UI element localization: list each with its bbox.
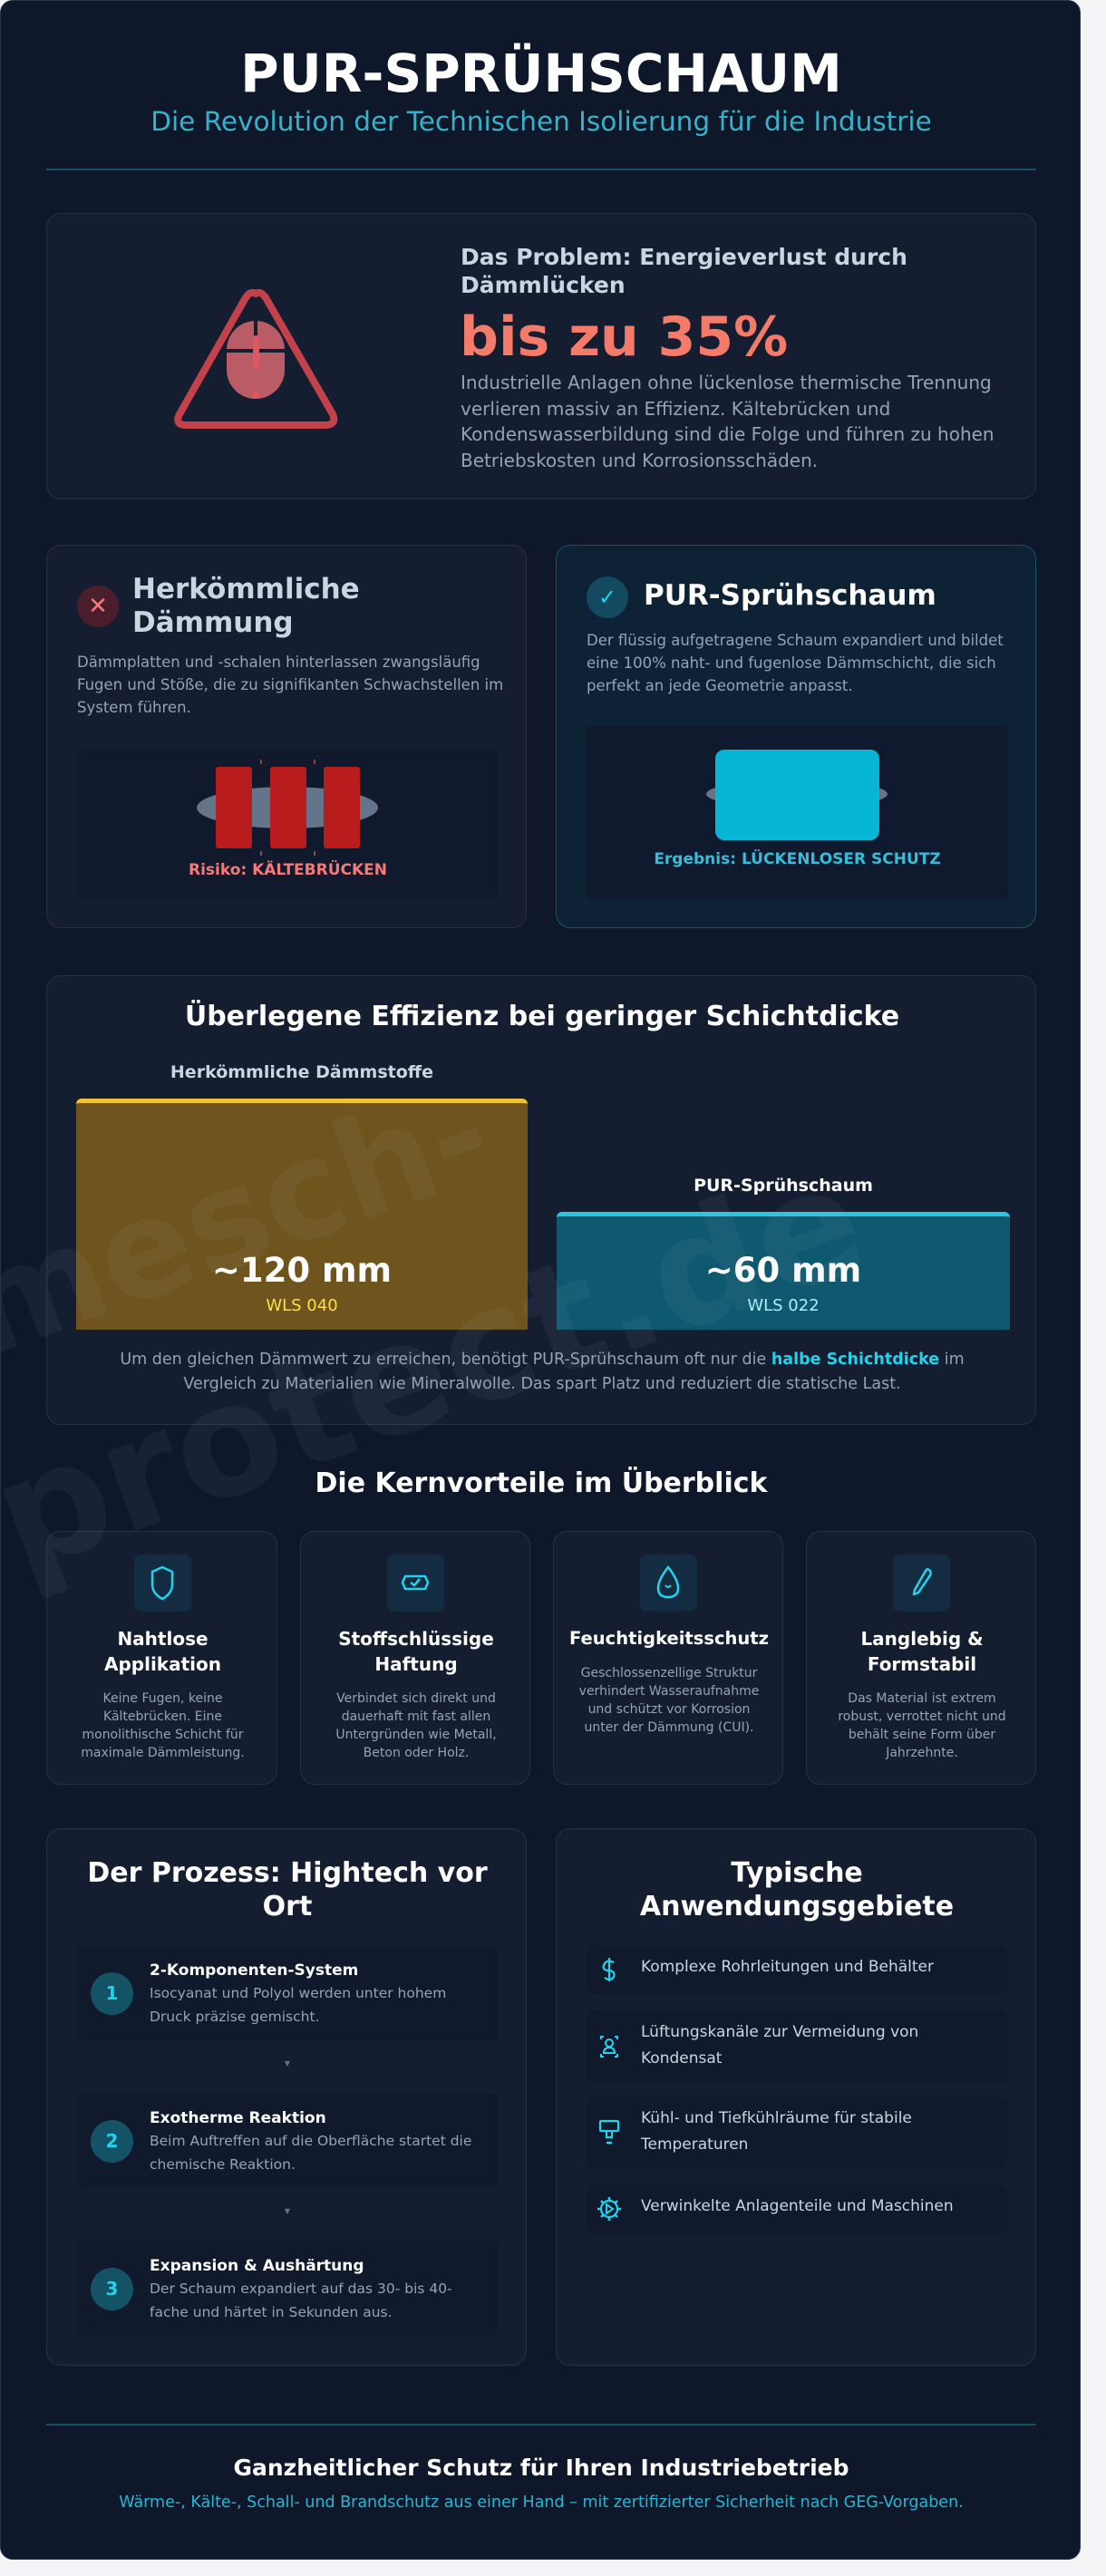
text: Dämmplatten und -schalen hinterlassen zwangsläufig Fugen und Stöße, die zu signifikanten Schwachstellen im System führen. — [77, 654, 503, 716]
step 3: 3 — [106, 2278, 118, 2300]
footer heading: Ganzheitlicher Schutz für Ihren Industriebetrieb — [233, 2455, 849, 2481]
step 1: 2-Komponenten-System — [150, 1961, 358, 1980]
bar: PUR: WLS 022 — [747, 1296, 820, 1315]
panel: benefit 1 — [46, 1531, 277, 1785]
step 2 — [77, 2093, 499, 2188]
bar: conventional: ~120 mm — [212, 1251, 392, 1290]
heading: core benefits: Die Kernvorteile im Überblick — [315, 1467, 767, 1499]
step 1: Isocyanat und Polyol werden unter hohem Druck präzise gemischt. — [150, 1985, 446, 2025]
icon: warning triangle — [174, 288, 337, 429]
item 4: Verwinkelte Anlagenteile und Maschinen — [641, 2197, 954, 2215]
icon: x — [77, 586, 119, 627]
arrow: ▼ — [285, 2059, 290, 2068]
problem heading: Das Problem: Energieverlust durch Dämmlücken — [461, 244, 907, 298]
arrow: ▼ — [285, 2207, 290, 2215]
step 2: Exotherme Reaktion — [150, 2109, 326, 2127]
icon: x: ✕ — [88, 593, 108, 620]
text: Der flüssig aufgetragene Schaum expandiert und bildet eine 100% naht- und fugenlose Dämmschicht, die sich perfekt an jede Geometrie anpasst. — [587, 632, 1004, 694]
item 2 — [587, 2010, 1008, 2083]
text: Keine Fugen, keine Kältebrücken. Eine monolithische Schicht für maximale Dämmleistung. — [81, 1691, 245, 1760]
panel: efficiency — [46, 975, 1036, 1425]
footer text: Wärme-, Kälte-, Schall- und Brandschutz aus einer Hand – mit zertifizierter Sicherheit nach GEG-Vorgaben. — [119, 2494, 964, 2512]
item 1 — [587, 1945, 1008, 1994]
icon: bond — [387, 1554, 444, 1612]
bar: PUR — [557, 1176, 1010, 1330]
text: Das Material ist extrem robust, verrottet nicht und behält seine Form über Jahrzehnte. — [838, 1691, 1006, 1760]
title: PUR-SPRÜHSCHAUM — [240, 43, 842, 104]
step 1 — [77, 1945, 499, 2040]
icon: drop — [640, 1554, 697, 1612]
bar: conventional: WLS 040 — [266, 1296, 338, 1315]
panel: problem — [46, 213, 1036, 499]
heading: Herkömmliche — [132, 573, 360, 605]
step 3: Expansion & Aushärtung — [150, 2257, 364, 2275]
subtitle: Die Revolution der Technischen Isolierung für die Industrie — [150, 106, 932, 137]
illustration: gaps — [77, 749, 499, 899]
step 3: Der Schaum expandiert auf das 30- bis 40-fache und härtet in Sekunden aus. — [150, 2281, 452, 2320]
bar: PUR: ~60 mm — [705, 1251, 861, 1290]
problem text: Industrielle Anlagen ohne lückenlose thermische Trennung verlieren massiv an Effizienz. Kältebrücken und Kondenswasserbildung sind die Folge und führen zu hohen Betriebskosten und Korrosionsschäden. — [461, 372, 994, 471]
heading: Der Prozess: Hightech vor Ort — [87, 1857, 488, 1922]
stat: bis zu 35% — [460, 305, 788, 369]
panel: benefit 2 — [300, 1531, 530, 1785]
item 3 — [587, 2097, 1008, 2168]
icon: shield — [134, 1554, 191, 1612]
bar chart — [76, 1062, 1010, 1330]
text: Geschlossenzellige Struktur verhindert Wasseraufnahme und schützt vor Korrosion unter der Dämmung (CUI). — [579, 1666, 759, 1735]
bar: PUR: PUR-Sprühschaum — [694, 1176, 873, 1196]
step 3 — [77, 2241, 499, 2336]
item 1: Komplexe Rohrleitungen und Behälter — [641, 1958, 934, 1976]
heading: Typische Anwendungsgebiete — [640, 1857, 954, 1922]
panel: PUR spray foam — [556, 545, 1036, 928]
heading: Dämmung — [132, 606, 294, 639]
step 2: Beim Auftreffen auf die Oberfläche startet die chemische Reaktion. — [150, 2133, 471, 2173]
heading — [132, 573, 360, 639]
label: Ergebnis: LÜCKENLOSER SCHUTZ — [654, 850, 941, 868]
panel: conventional insulation — [46, 545, 527, 928]
caption: Um den gleichen Dämmwert zu erreichen, benötigt PUR-Sprühschaum oft nur die halbe Schichtdicke im Vergleich zu Materialien wie Mineralwolle. Das spart Platz und reduziert die statische Last. — [120, 1351, 965, 1393]
heading: Überlegene Effizienz bei geringer Schichtdicke — [185, 1001, 899, 1032]
title: Stoffschlüssige Haftung — [338, 1628, 494, 1675]
text: Verbindet sich direkt und dauerhaft mit fast allen Untergründen wie Metall, Beton oder Holz. — [335, 1691, 497, 1760]
heading: PUR-Sprühschaum — [644, 579, 936, 612]
panel: benefit 3 — [553, 1531, 783, 1785]
panel: benefit 4 — [806, 1531, 1036, 1785]
step 2: 2 — [106, 2130, 118, 2152]
panel: applications — [556, 1828, 1036, 2366]
bar: conventional — [76, 1062, 528, 1330]
icon: check — [587, 576, 628, 618]
icon: pencil — [893, 1554, 950, 1612]
item 2: Lüftungskanäle zur Vermeidung von Kondensat — [641, 2023, 918, 2068]
item 4 — [587, 2184, 1008, 2233]
bar: conventional: Herkömmliche Dämmstoffe — [170, 1062, 433, 1082]
title: Nahtlose Applikation — [104, 1628, 221, 1675]
panel: process — [46, 1828, 527, 2366]
icon: check: ✓ — [598, 585, 616, 610]
title: Langlebig & Formstabil — [860, 1628, 984, 1675]
label: Risiko: KÄLTEBRÜCKEN — [189, 861, 387, 879]
illustration: seamless — [587, 725, 1008, 899]
step 1: 1 — [106, 1982, 118, 2004]
title: Feuchtigkeitsschutz — [569, 1628, 769, 1649]
item 3: Kühl- und Tiefkühlräume für stabile Temperaturen — [641, 2109, 912, 2154]
